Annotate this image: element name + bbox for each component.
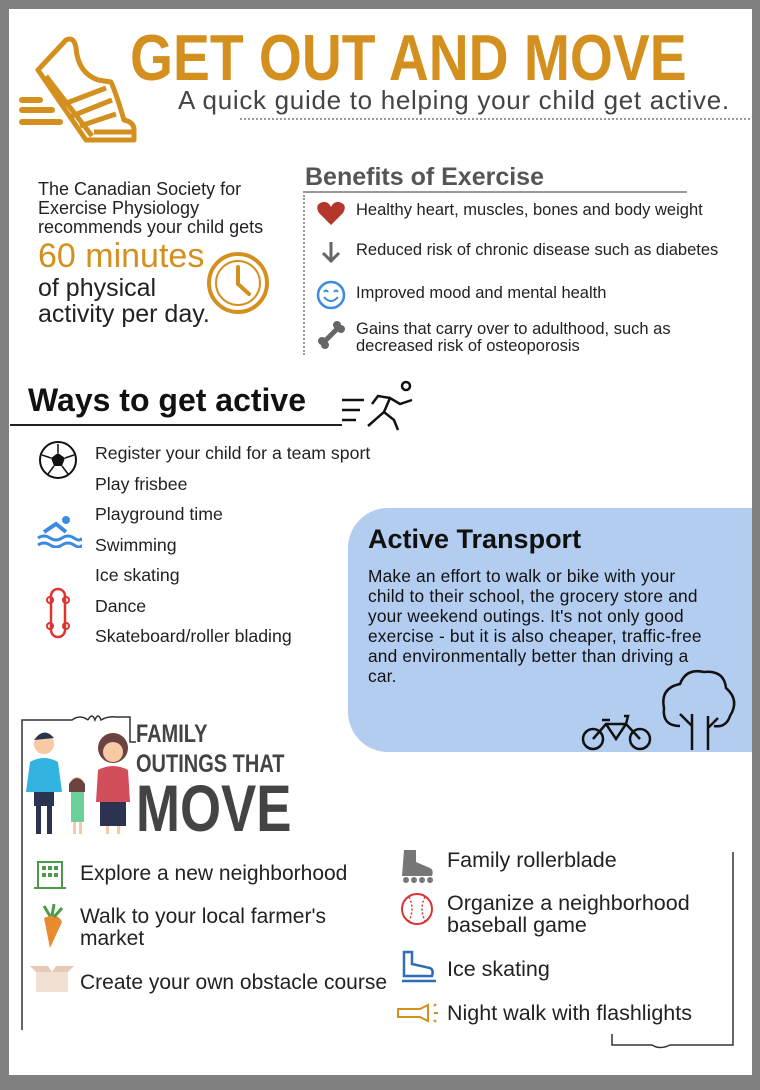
text block: transport: car.: [368, 666, 397, 686]
panel: benefits: Improved mood and mental health: [356, 284, 606, 302]
list: ways: Swimming: [95, 534, 177, 554]
text block: transport: child to their school, the grocery store and: [368, 586, 698, 606]
panel: family outings: Create your own obstacle course: [80, 971, 387, 994]
icon: rollerblade: [402, 850, 433, 883]
panel: benefits: Healthy heart, muscles, bones and body weight: [356, 201, 703, 219]
text block: recommendation: Exercise Physiology: [38, 198, 199, 218]
panel: family outings: Organize a neighborhood: [447, 891, 690, 915]
panel: benefits: decreased risk of osteoporosis: [356, 337, 580, 355]
icon: down arrow: [322, 242, 340, 263]
illustration: family: [26, 732, 130, 834]
icon: heart: [317, 202, 345, 225]
icon: smiley: [316, 280, 346, 310]
icon: shoe: [19, 36, 136, 142]
heading: family outings: FAMILY: [136, 720, 208, 748]
icon: bone: [318, 321, 345, 349]
list: ways: Play frisbee: [95, 474, 187, 494]
panel: family outings: Night walk with flashlights: [447, 1001, 692, 1025]
panel: benefits: [303, 163, 718, 355]
icon: tree: [662, 670, 736, 750]
text block: transport: and environmentally better than driving a: [368, 646, 688, 666]
panel: family outings: [21, 715, 734, 1048]
icon: bike: [582, 714, 652, 750]
heading: active transport: Active Transport: [368, 524, 581, 554]
icon: swimmer: [37, 516, 82, 548]
icon: soccer ball: [39, 441, 77, 479]
text block: recommendation: activity per day.: [38, 300, 210, 328]
text block: recommendation: recommends your child gets: [38, 217, 263, 237]
panel: benefits: Gains that carry over to adulthood, such as: [356, 320, 671, 338]
text block: transport: your weekend outings. It's not only good: [368, 606, 684, 626]
text block: transport: [368, 566, 702, 686]
icon: box: [30, 966, 74, 992]
text block: recommendation: The Canadian Society for: [38, 179, 241, 199]
title: GET OUT AND MOVE: [130, 21, 687, 94]
text block: transport: Make an effort to walk or bike with your: [368, 566, 675, 586]
panel: family outings: market: [80, 927, 144, 950]
heading: family outings: [136, 720, 291, 845]
icon: skateboard: [46, 588, 70, 638]
panel: family outings: Ice skating: [447, 957, 550, 981]
list: ways: Ice skating: [95, 565, 180, 585]
panel: family outings: baseball game: [447, 913, 587, 937]
heading: family outings: MOVE: [136, 771, 291, 845]
icon: baseball: [401, 893, 433, 925]
panel: family outings: Walk to your local farmer's: [80, 905, 326, 928]
text block: recommendation: [38, 179, 263, 328]
heading: ways to get active: Ways to get active: [28, 382, 306, 418]
panel: family outings: Family rollerblade: [447, 848, 617, 872]
icon: building: [34, 861, 66, 889]
list: ways: Dance: [95, 596, 146, 616]
list: ways: [37, 441, 370, 646]
list: ways: Register your child for a team sport: [95, 443, 370, 463]
list: ways: Skateboard/roller blading: [95, 626, 292, 646]
icon: runner: [342, 380, 412, 430]
icon: ice skate: [402, 950, 436, 982]
panel: benefits: Reduced risk of chronic disease such as diabetes: [356, 241, 718, 259]
subtitle: A quick guide to helping your child get active.: [178, 85, 730, 115]
list: ways: Playground time: [95, 504, 223, 524]
panel: family outings: Explore a new neighborhood: [80, 862, 347, 885]
icon: carrot: [42, 904, 63, 948]
heading: benefits: Benefits of Exercise: [305, 163, 544, 191]
icon: clock: [207, 252, 269, 314]
icon: flashlight: [397, 1003, 438, 1023]
text block: transport: exercise - but it is also cheaper, traffic-free: [368, 626, 702, 646]
heading: family outings: OUTINGS THAT: [136, 750, 285, 778]
panel: active transport: [348, 508, 752, 752]
text block: recommendation: 60 minutes: [38, 237, 204, 275]
text block: recommendation: of physical: [38, 274, 156, 302]
